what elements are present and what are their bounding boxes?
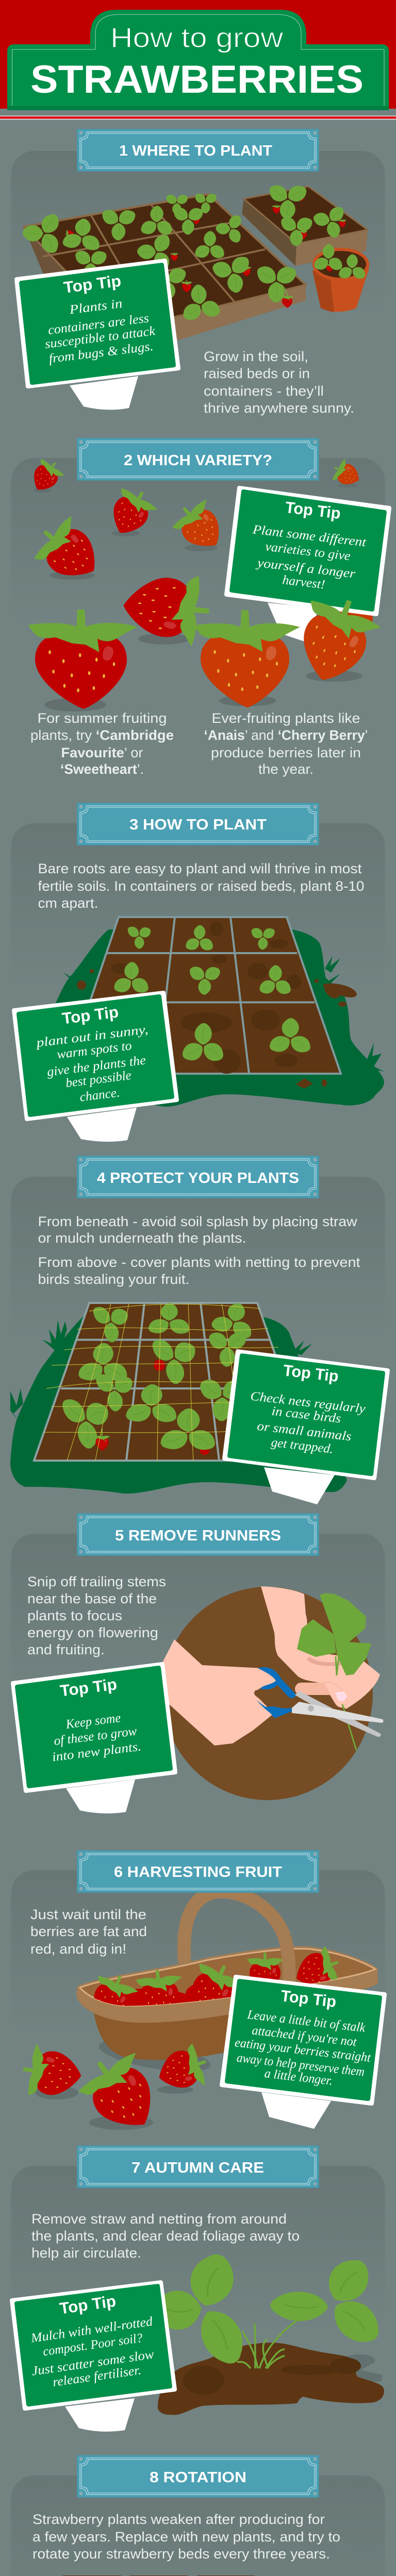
body text 4: From above - cover plants with netting to prevent [38,1255,360,1270]
top tip 3: plant out in sunny, [35,1023,149,1050]
body text 4: birds stealing your fruit. [38,1272,190,1287]
top tip 5: Keep some [64,1711,122,1732]
body text 2 left: For summer fruiting [37,710,167,726]
body text 2 left: ‘Sweetheart’. [60,761,144,777]
top tip 1: Plants in [68,297,123,317]
red strawberries [25,455,212,711]
top tip 3: best possible [65,1069,132,1090]
section 7: autumn care [11,2146,388,2432]
top tip 1: from bugs & slugs. [48,340,154,366]
top tip 2: Plant some different [252,522,368,550]
top tip 2: Top Tip [284,498,342,522]
title banner [7,10,389,110]
orange strawberries in front of sign [194,588,386,707]
body text 2 right: produce berries later in [211,745,361,760]
body text 2 right: ‘Anais’ and ‘Cherry Berry’ [204,727,368,743]
heading banner 5: 5 REMOVE RUNNERS [115,1528,281,1544]
body text 6 [30,1907,147,1957]
top tip 2: harvest! [282,573,326,592]
top tip 4: get trapped. [270,1435,334,1456]
title banner: How to grow [110,23,284,54]
body text 2 right: Ever-fruiting plants like [211,710,360,726]
heading banner 8: 8 ROTATION [150,2469,246,2486]
body text 8: rotate your strawberry beds every three years. [32,2546,330,2562]
body text 5: energy on flowering [27,1625,158,1640]
section 3: how to plant [11,803,385,1142]
section 5: remove runners [11,1514,385,1814]
body text 4: or mulch underneath the plants. [38,1230,246,1246]
top tip 1 [16,261,178,410]
heading banner 6: 6 HARVESTING FRUIT [114,1864,282,1880]
body text 5: near the base of the [27,1591,157,1606]
body text 4 [38,1214,360,1287]
top tip 3: chance. [79,1086,121,1105]
top tip 7: release fertiliser. [52,2363,142,2389]
body text 8: a few years. Replace with new plants, and try to [32,2529,340,2545]
loose strawberries [20,2041,213,2144]
illustration: plant pot [312,244,369,312]
top tip 3 [14,993,177,1142]
illustration: planting bed [56,917,384,1107]
heading banner 5 [77,1514,319,1555]
body text 3 [38,861,364,911]
section 4: protect your plants [10,1156,388,1504]
body text 8: Strawberry plants weaken after producing for [32,2512,325,2527]
top tip 6: eating your berries straight [234,2036,372,2065]
heading banner 2 [77,438,319,480]
top tip 5: Top Tip [59,1675,118,1700]
top tip 6: Leave a little bit of stalk [246,2008,367,2035]
heading banner 2: 2 WHICH VARIETY? [124,452,272,469]
illustration: large planter [15,184,306,358]
top tip 3: warm spots to [56,1039,133,1062]
heading banner 4 [77,1156,319,1198]
body text 2 right [204,710,368,777]
top tip 7: Top Tip [58,2292,117,2317]
illustration: snipping runners [162,1586,384,1800]
section 6: harvesting fruit [11,1851,385,2144]
heading banner 3: 3 HOW TO PLANT [129,817,267,833]
illustration: basket [76,1944,378,2078]
body text 1: Grow in the soil, [204,349,308,364]
heading banner 1: 1 WHERE TO PLANT [119,143,272,159]
body text 1: thrive anywhere sunny. [204,400,354,416]
top tip 6 [222,1977,385,2129]
section 1: where to plant [11,129,385,416]
body text 5: and fruiting. [27,1642,105,1657]
body text 7: the plants, and clear dead foliage away to [31,2228,300,2244]
orange strawberries behind sign [168,456,374,631]
body text 7: Remove straw and netting from around [31,2211,287,2227]
body text 7 [31,2211,300,2261]
body text 6: Just wait until the [30,1907,146,1922]
illustration: netted bed [10,1293,347,1494]
section 8: rotation [11,2455,386,2576]
top tip 1: containers are less [47,311,150,337]
top tip 3: give the plants the [46,1053,146,1079]
body text 5: Snip off trailing stems [27,1574,166,1589]
heading banner 8 [77,2455,319,2497]
body text 1 [204,349,354,416]
body text 2 right: the year. [258,761,314,777]
top tip 5: of these to grow [53,1724,138,1748]
top tip 2: varieties to give [265,540,351,563]
body text 4: From beneath - avoid soil splash by placing straw [38,1214,357,1229]
illustration: small planter [242,170,368,266]
top tip 2: yourself a longer [255,556,356,581]
body text 1: raised beds or in [204,366,310,381]
body text 3: Bare roots are easy to plant and will thrive in most [38,861,362,876]
top tip 7: Just scatter some slow [31,2347,155,2379]
top tip 6: attached if you're not [251,2024,358,2049]
body text 3: fertile soils. In containers or raised beds, plant 8-10 [38,878,364,894]
body text 6: red, and dig in! [30,1941,126,1957]
basket handle front [285,1937,289,1984]
body text 1: containers - they’ll [204,383,324,399]
basket handle back [184,1892,285,1963]
top tip 4: in case birds [271,1404,342,1426]
top tip 5: into new plants. [51,1740,142,1765]
section 2: which variety [11,438,389,777]
heading banner 7: 7 AUTUMN CARE [131,2160,264,2176]
top tip 5 [13,1664,175,1814]
top tip 4: Top Tip [282,1361,340,1385]
body text 2 left [30,710,174,777]
top tip 4: Check nets regularly [250,1389,367,1416]
top tip 4 [224,1351,388,1504]
top tip 1: susceptible to attack [44,324,156,351]
top tip 6: Top Tip [280,1987,337,2011]
top tip 1: Top Tip [62,272,122,297]
illustration: rotation beds [13,2575,309,2576]
body text 5: plants to focus [27,1608,122,1623]
top tip 2 [226,488,389,641]
header [0,0,396,120]
body text 2 left: Favourite’ or [61,745,143,760]
top tip 7: Mulch with well-rotted [29,2315,154,2346]
body text 5 [27,1574,166,1657]
top tip 3: Top Tip [61,1003,120,1028]
body text 3: cm apart. [38,895,98,911]
illustration: plant on mound [152,2249,388,2415]
body text 7: help air circulate. [31,2245,141,2261]
heading banner 1 [77,129,319,171]
heading banner 3 [77,803,319,845]
top tip 6: away to help preserve them [236,2051,365,2079]
top tip 6: a little longer. [263,2066,334,2088]
heading banner 6 [77,1851,319,1892]
heading banner 7 [77,2146,319,2188]
top tip 4: or small animals [256,1419,352,1444]
body text 8 [32,2512,340,2562]
top tip 7: compost. Poor soil? [42,2331,144,2359]
body text 2 left: plants, try ‘Cambridge [30,727,174,743]
title banner: STRAWBERRIES [30,58,364,101]
heading banner 4: 4 PROTECT YOUR PLANTS [97,1170,299,1187]
body text 6: berries are fat and [30,1924,147,1939]
top tip 7 [12,2282,175,2432]
